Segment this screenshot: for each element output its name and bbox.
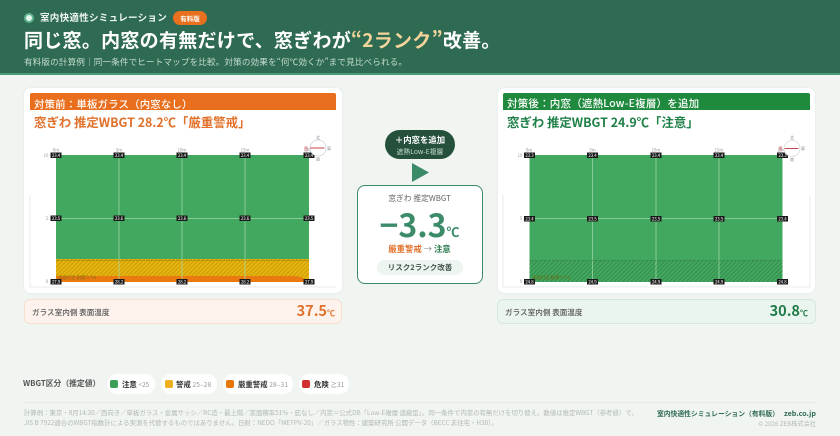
heatmap: after: 24.9	[652, 280, 661, 286]
delta label: 窓ぎわ 推定WBGT	[388, 193, 451, 204]
verdict: before: 窓ぎわ 推定WBGT 28.2℃「厳重警戒」	[34, 113, 250, 131]
icon: compass before: 西	[304, 146, 308, 152]
panel heading: before	[30, 93, 336, 110]
surface label: ガラス室内側 表面温度	[32, 306, 110, 318]
icon: status dot	[24, 13, 34, 23]
heatmap: after: 20m	[778, 148, 786, 154]
surface label: ガラス室内側 表面温度	[505, 306, 582, 318]
legend item: danger: 危険 ≧31	[314, 379, 344, 390]
measure note: 遮熱Low-E複層	[397, 146, 443, 156]
heatmap: before: 28.2	[241, 280, 250, 286]
rank improvement tag	[377, 260, 463, 274]
heatmap: before: 23.5	[305, 216, 314, 222]
header banner	[0, 0, 840, 75]
heatmap: after: 23.5	[652, 216, 661, 222]
heatmap: before: 15m	[241, 148, 249, 154]
legend title: WBGT区分（推定値）	[23, 378, 100, 389]
product label: 室内快適性シミュレーション	[40, 10, 167, 24]
footer	[23, 402, 817, 432]
heatmap: after: 23.5	[588, 216, 597, 222]
measure title: ＋内窓を追加	[395, 134, 445, 146]
heatmap: before: 23.4	[241, 153, 250, 159]
heatmap: after: 24.8	[778, 280, 787, 286]
heatmap: after: 23.3	[778, 153, 787, 159]
footer brand: 室内快適性シミュレーション（有料版） zeb.co.jp	[657, 408, 816, 419]
heatmap: before: 27.9	[52, 280, 61, 286]
surface value: 30.8℃	[770, 300, 808, 320]
rank change: 厳重警戒 → 注意	[388, 242, 451, 254]
heatmap: before: 10	[44, 153, 49, 159]
paid edition badge	[173, 11, 207, 25]
heatmap: after: 床面付近 創建 0.7m	[532, 274, 570, 281]
icon: compass after	[778, 134, 805, 163]
heatmap: after: 23.4	[715, 153, 724, 159]
heatmap: before: 23.5	[52, 216, 61, 222]
heatmap: after: 23.4	[588, 153, 597, 159]
legend	[23, 374, 349, 394]
title: 同じ窓。内窓の有無だけで、窓ぎわが“2ランク”改善。	[24, 26, 501, 53]
copyright: © 2026 ZEB株式会社	[758, 418, 816, 428]
footnote	[24, 408, 638, 427]
legend item: severe warning: 厳重警戒 28–31	[238, 379, 288, 390]
footnote: 計算例：東京・8月14:30／西向き／単板ガラス・金属サッシ／RC造・最上階／窓面積率51%・庇なし／内窓＝公式DB「Low-E複層 遮蔽型」。同一条件で内窓の有無だけを切り替え。数値は推定WBGT（参考値）で、	[24, 408, 638, 417]
heatmap: before: 27.9	[305, 280, 314, 286]
heatmap: before: 23.4	[178, 153, 187, 159]
heatmap: before: 5m	[116, 148, 122, 154]
legend item: caution: 注意 <25	[122, 379, 149, 390]
verdict: after: 窓ぎわ 推定WBGT 24.9℃「注意」	[507, 113, 699, 131]
heatmap: before: 床面付近 創建 0.7m	[58, 274, 96, 281]
heatmap: after: 23.4	[525, 216, 534, 222]
icon: compass after: 西	[778, 146, 782, 152]
heatmap: after: 5	[520, 216, 523, 222]
icon: compass after: 北	[790, 134, 794, 141]
heatmap: before: 23.6	[178, 216, 187, 222]
heatmap: after: 24.9	[588, 280, 597, 286]
heatmap: after: 23.4	[778, 216, 787, 222]
heatmap: before: 23.4	[305, 153, 314, 159]
icon: compass before: 東	[327, 145, 331, 152]
panel: delta result	[357, 185, 483, 284]
paid edition badge: 有料版	[180, 13, 200, 23]
heatmap: before: 0	[46, 279, 49, 285]
heatmap: after: 0	[520, 279, 523, 285]
heatmap: after: 10	[518, 153, 523, 159]
heatmap: after: 5m	[589, 148, 596, 154]
icon: compass before	[304, 134, 331, 162]
panel: after	[498, 88, 815, 293]
heatmap: before: 0m	[53, 148, 59, 154]
measure pill	[385, 130, 455, 159]
heatmap: before: 28.2	[115, 280, 124, 286]
legend item: danger	[299, 374, 349, 394]
heatmap: after: 0m	[526, 148, 532, 154]
heatmap: after: 10m	[652, 148, 660, 154]
panel: before	[24, 88, 342, 293]
heatmap: after: 24.9	[715, 280, 724, 286]
heatmap: after: 23.4	[652, 153, 661, 159]
heatmap: after: 24.8	[525, 280, 534, 286]
footnote: JIS B 7922適合のWBGT指数計による実測を代替するものではありません。日射：NEDO「METPV-20」／ガラス物性：建築研究所 公開データ（BECC 非住宅・H30）。	[24, 418, 498, 427]
surface value: 37.5℃	[297, 300, 335, 320]
heatmap: before: 23.6	[241, 216, 250, 222]
icon: compass before: 南	[316, 156, 320, 162]
delta value: −3.3℃	[379, 201, 460, 247]
subtitle: 有料版の計算例｜同一条件でヒートマップを比較。対策の効果を“何℃効くか”まで見比べられる。	[24, 56, 407, 68]
icon: compass after: 南	[790, 156, 794, 163]
heatmap: before: 20m	[305, 148, 313, 154]
legend item: warning	[161, 374, 217, 394]
heatmap: after: 23.3	[525, 153, 534, 159]
legend item: severe warning	[223, 374, 293, 394]
heatmap: before: 28.2	[178, 280, 187, 286]
heatmap: before: 23.4	[115, 153, 124, 159]
heatmap: before: 5	[46, 216, 49, 222]
heatmap: after: 15m	[715, 148, 723, 154]
icon: compass after: 東	[801, 145, 805, 152]
panel heading: after	[503, 93, 810, 110]
heatmap: before: 23.6	[115, 216, 124, 222]
surface temperature: before	[24, 299, 342, 324]
heatmap: before: 10m	[178, 148, 186, 154]
legend item: caution	[107, 374, 155, 394]
heatmap: before: 23.4	[52, 153, 61, 159]
rank improvement tag: リスク2ランク改善	[388, 262, 452, 272]
heatmap: after: 23.5	[715, 216, 724, 222]
legend item: warning: 警戒 25–28	[176, 379, 211, 390]
icon: compass before: 北	[316, 134, 320, 141]
surface temperature: after	[497, 299, 816, 324]
